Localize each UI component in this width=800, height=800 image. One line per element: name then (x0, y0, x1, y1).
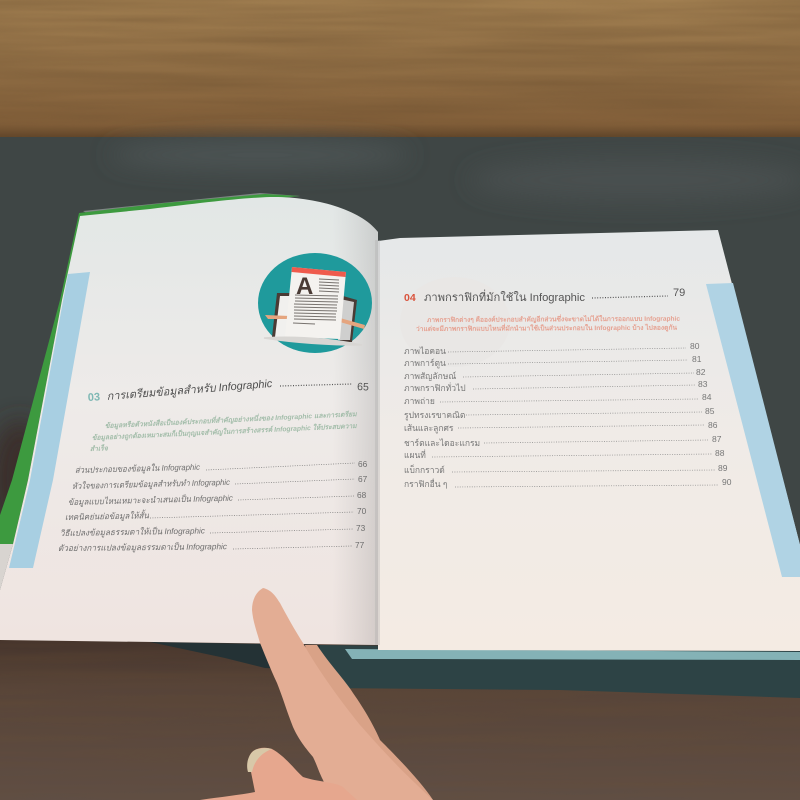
dark table surface (0, 137, 800, 647)
hand: pointing finger (252, 588, 433, 800)
contents list, left page (58, 459, 368, 554)
contents list, right page: ภาพไอคอน (404, 346, 446, 356)
green book cover edge (0, 193, 300, 590)
thumbnail (247, 748, 272, 772)
contents list, left page: 70 (357, 506, 367, 516)
left page (0, 197, 380, 645)
heading 03: การเตรียมข้อมูลสำหรับ Infographic (106, 377, 273, 403)
heading 03: 03 (88, 391, 100, 404)
contents list, left page: 66 (358, 459, 368, 469)
contents list, left page: หัวใจของการเตรียมข้อมูลสำหรับทำ Infographic (72, 477, 231, 492)
contents list, right page: 83 (698, 379, 708, 389)
contents list, left page: เทคนิคย่นย่อข้อมูลให้สั้น (65, 509, 149, 523)
contents list, left page: ส่วนประกอบของข้อมูลใน Infographic (75, 462, 201, 476)
heading 03: 65 (357, 381, 369, 393)
contents list, right page: ภาพสัญลักษณ์ (404, 371, 456, 381)
dark book cover band under right page (320, 645, 800, 698)
contents list, right page: 85 (705, 406, 715, 416)
contents list, right page: 84 (702, 392, 712, 402)
heading 04: ภาพกราฟิกที่มักใช้ใน Infographic (424, 289, 586, 304)
right page (345, 230, 800, 660)
contents list, right page: เส้นและลูกศร (404, 423, 454, 434)
intro paragraph, right page (416, 313, 680, 334)
contents list, right page: 90 (722, 477, 732, 487)
intro paragraph, right page: ภาพกราฟิกต่างๆ คือองค์ประกอบสำคัญอีกส่วนซึ่งจะขาดไม่ได้ในการออกแบบ Infographic (427, 313, 680, 324)
contents list, right page: รูปทรงเรขาคณิต (404, 410, 465, 421)
contents list, left page: 68 (357, 490, 367, 500)
contents list, left page: วิธีแปลงข้อมูลธรรมดาให้เป็น Infographic (60, 525, 206, 539)
contents list, right page: กราฟิกอื่น ๆ (404, 478, 448, 489)
contents list, left page: ข้อมูลแบบไหนเหมาะจะนำเสนอเป็น Infographic (68, 493, 234, 508)
contents list, right page: ภาพกราฟิกทั่วไป (404, 382, 466, 393)
contents list, left page: 67 (358, 474, 368, 484)
right page blue band (706, 283, 800, 577)
gutter shadow (375, 240, 380, 645)
letter A on document: A (296, 273, 313, 300)
intro paragraph, left page: ข้อมูลอย่างถูกต้องเหมาะสมก็เป็นกุญแจสำคัญในการสร้างสรรค์ Infographic ให้ประสบความ (92, 421, 357, 442)
contents list, right page: แผนที่ (404, 449, 426, 460)
lower table surface (0, 640, 800, 800)
contents list, left page: 77 (355, 540, 365, 550)
hand: thumb (200, 748, 357, 800)
intro paragraph, left page (90, 408, 357, 453)
contents list, right page: 87 (712, 434, 722, 444)
contents list, right page: 89 (718, 463, 728, 473)
intro paragraph, left page: สำเร็จ (90, 443, 109, 453)
contents list, right page: 81 (692, 354, 702, 364)
contents list, right page (404, 341, 732, 489)
heading 04: 04 (404, 292, 416, 304)
contents list, right page: ชาร์ตและไดอะแกรม (404, 438, 480, 448)
heading 04: 79 (673, 287, 685, 299)
contents list, right page: ภาพการ์ตูน (404, 358, 446, 369)
hand: middle finger behind (305, 645, 433, 800)
intro paragraph, right page: ว่าแต่จะมีภาพกราฟิกแบบไหนที่มักนำมาใช้เป็นส่วนประกอบใน Infographic บ้าง ไปลองดูกัน (416, 322, 678, 334)
contents list, right page: 88 (715, 448, 725, 458)
faint grey circle behind heading (400, 277, 510, 367)
shadow wedge under left page (150, 642, 320, 670)
wooden wall background (0, 0, 800, 138)
heading 03 (88, 377, 369, 404)
contents list, left page: 73 (356, 523, 366, 533)
left page blue band (9, 272, 90, 568)
contents list, right page: ภาพถ่าย (404, 396, 435, 406)
heading 04 (404, 287, 685, 304)
contents list, right page: 86 (708, 420, 718, 430)
contents list, right page: 80 (690, 341, 700, 351)
illustration: document on teal circle (258, 253, 372, 353)
contents list, right page: แบ็กกราวด์ (404, 464, 445, 475)
contents list, right page: 82 (696, 367, 706, 377)
contents list, left page: ตัวอย่างการแปลงข้อมูลธรรมดาเป็น Infographic (58, 541, 228, 554)
intro paragraph, left page: ข้อมูลหรือตัวหนังสือเป็นองค์ประกอบที่สำคัญอย่างหนึ่งของ Infographic และการเตรียม (105, 408, 357, 430)
